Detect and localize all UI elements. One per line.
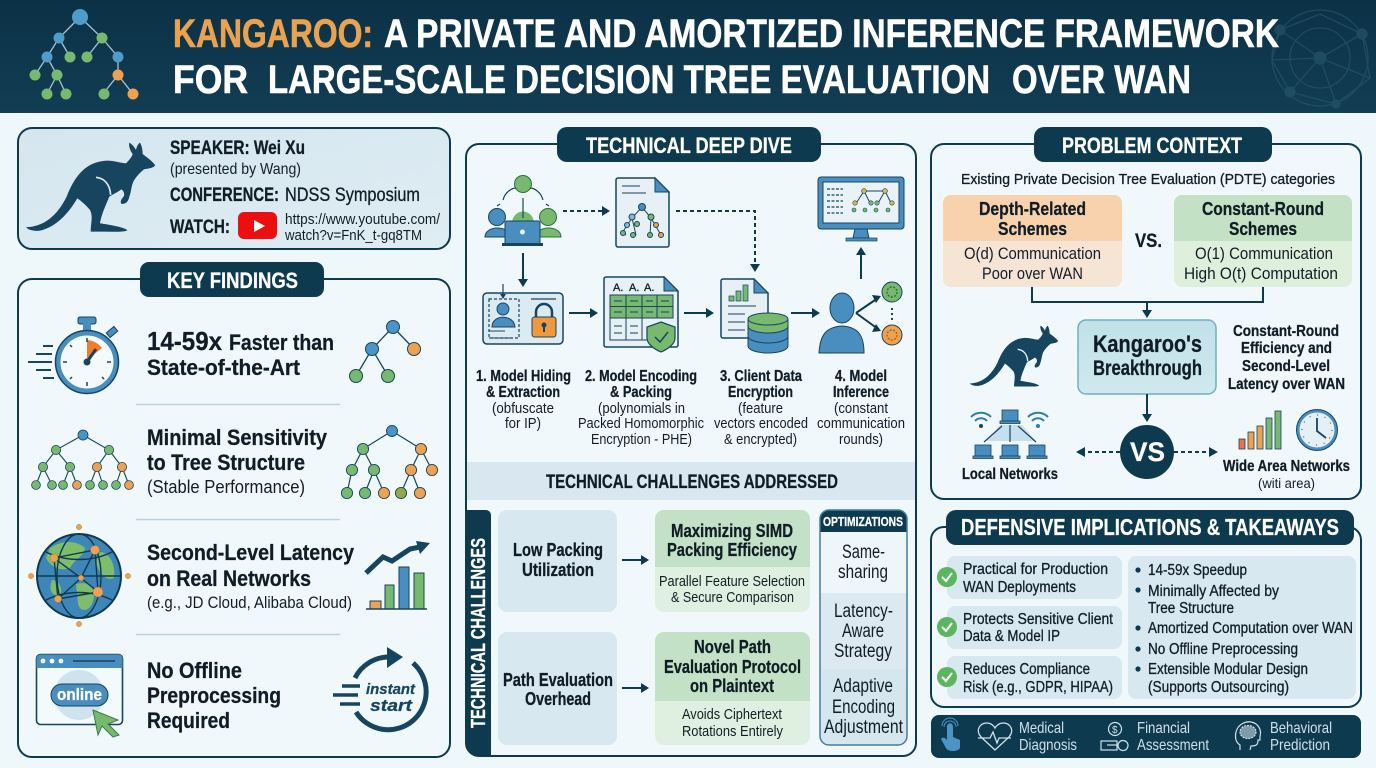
icon: youtube play button: [238, 212, 277, 239]
icon: kangaroo small: [970, 326, 1058, 387]
heading: technical deep dive: [557, 127, 821, 162]
arrow: vs to wan: [1174, 447, 1218, 457]
speaker text: [170, 138, 420, 238]
label: financial assessment: Assessment: [1137, 737, 1209, 754]
panel: key findings: [18, 262, 450, 757]
breakthrough description: Latency over WAN: [1228, 376, 1345, 393]
heading: problem context: [1034, 127, 1272, 162]
icon: team with laptop: [485, 176, 561, 246]
label: behavioral prediction: [1270, 720, 1332, 754]
label: wide area networks: [1223, 458, 1350, 491]
icon: browser online: online: [57, 685, 102, 704]
finding 4 text: [147, 658, 281, 733]
takeaway: practical for production: WAN Deployments: [963, 579, 1076, 596]
optimizations column: Same-: [842, 542, 885, 563]
solution: novel path evaluation protocol: Rotations Entirely: [682, 723, 783, 740]
box: constant-round schemes: Schemes: [1229, 219, 1297, 239]
box: constant-round schemes: High O(t) Computation: [1184, 264, 1338, 283]
icon: data document and database: [721, 279, 788, 353]
label: behavioral prediction: Prediction: [1270, 737, 1330, 754]
title: OVER WAN: [1012, 58, 1191, 102]
challenge: path evaluation overhead: Path Evaluation: [503, 670, 613, 690]
finding 3 text: on Real Networks: [147, 566, 311, 591]
panel: speaker info: [18, 128, 450, 249]
solution: maximizing simd packing: [655, 510, 810, 612]
sidebar: technical challenges: TECHNICAL CHALLENGES: [468, 538, 490, 728]
heading: technical deep dive: TECHNICAL DEEP DIVE: [586, 133, 792, 158]
vs circle: VS: [1130, 437, 1165, 467]
step 3 label: 3. Client Data: [720, 368, 802, 385]
vs label: VS.: [1135, 231, 1162, 252]
step 4 label: (constant: [834, 400, 889, 417]
step 4 label: [817, 368, 905, 448]
icon: decision tree logo: [30, 9, 138, 100]
arrow: step 2 to step 3: [684, 308, 714, 318]
step 1 label: & Extraction: [486, 384, 560, 401]
icon: unbalanced tree right: [341, 426, 438, 499]
finding 2 text: Minimal Sensitivity: [147, 425, 328, 450]
finding 2 text: to Tree Structure: [147, 450, 305, 475]
takeaway bullet list: Tree Structure: [1148, 600, 1234, 617]
speaker text: (presented by Wang): [170, 161, 301, 178]
optimizations column: Adaptive: [833, 676, 893, 697]
arrow: step 3 to step 4: [791, 308, 820, 318]
title: [173, 12, 1279, 102]
label: wide area networks: (witi area): [1258, 475, 1315, 491]
takeaway: reduces compliance risk: Reduces Compliance: [963, 661, 1090, 678]
solution: novel path evaluation protocol: Evaluation Protocol: [664, 657, 801, 677]
challenge: low packing utilization: [498, 510, 617, 612]
connector: schemes to breakthrough: [1032, 287, 1263, 318]
band: technical challenges addressed: TECHNICAL CHALLENGES ADDRESSED: [546, 472, 838, 493]
breakthrough description: Efficiency and: [1241, 340, 1332, 357]
breakthrough description: [1228, 323, 1345, 393]
title: LARGE-SCALE DECISION TREE EVALUATION: [268, 58, 990, 102]
arrow: team to model hiding: [518, 253, 528, 287]
icon: latency chart with arrow: [366, 541, 430, 609]
heading: problem context: PROBLEM CONTEXT: [1062, 133, 1242, 158]
step 1 label: 1. Model Hiding: [476, 368, 571, 385]
optimizations column: Strategy: [834, 641, 892, 662]
label: financial assessment: [1137, 720, 1209, 754]
step 3 label: vectors encoded: [714, 415, 808, 432]
step 4 label: communication: [817, 415, 905, 432]
heading: key findings: KEY FINDINGS: [167, 268, 298, 293]
step 3 label: [714, 368, 808, 448]
box: constant-round schemes: Constant-Round: [1202, 199, 1324, 219]
video url: watch?v=FnK_t-gq8TM: [284, 227, 422, 244]
box: kangaroo's breakthrough: Kangaroo's: [1093, 331, 1202, 358]
takeaway bullet list: Extensible Modular Design: [1148, 661, 1308, 678]
optimizations column: Encoding: [832, 697, 895, 718]
breakthrough description: Constant-Round: [1233, 323, 1339, 340]
label: medical diagnosis: Medical: [1019, 720, 1064, 737]
label: medical diagnosis: [1019, 720, 1077, 754]
heading: key findings: [140, 262, 324, 297]
label: medical diagnosis: Diagnosis: [1019, 737, 1077, 754]
arrow: path evaluation to novel protocol: [622, 683, 649, 693]
intro sentence: Existing Private Decision Tree Evaluation (PDTE) categories: [961, 171, 1335, 188]
speaker text: WATCH:: [170, 217, 230, 238]
challenge: path evaluation overhead: Overhead: [525, 689, 591, 709]
speaker text: CONFERENCE:: [170, 185, 279, 206]
icon: instant start: start: [370, 696, 414, 715]
box: constant-round schemes: O(1) Communication: [1195, 244, 1333, 263]
finding 1 text: 14-59x: [147, 326, 222, 356]
label: local networks: Local Networks: [962, 466, 1058, 483]
icon: financial coins: $: [1112, 725, 1118, 736]
arrow: step 1 to step 2: [569, 308, 598, 318]
finding 2 text: (Stable Performance): [147, 477, 305, 497]
step 4 label: Inference: [833, 384, 889, 401]
icon: kangaroo silhouette: [26, 143, 155, 232]
step 3 label: (feature: [738, 400, 783, 417]
icon: encoded table with shield: A.: [629, 282, 639, 294]
finding 4 text: Required: [147, 708, 230, 733]
challenge: low packing utilization: Utilization: [522, 560, 594, 580]
takeaway: reduces compliance risk: [937, 656, 1122, 699]
header banner: [0, 0, 1376, 113]
icon: pointing hand: [941, 718, 960, 751]
icon: person inference: [819, 282, 902, 353]
step 4 label: 4. Model: [835, 368, 887, 385]
icon: heart pulse: [978, 723, 1012, 750]
icon: decorative network right: [1272, 10, 1370, 108]
icon: encoded table with shield: [604, 277, 678, 352]
box: depth-related schemes: [943, 195, 1122, 287]
breakthrough description: Second-Level: [1242, 358, 1330, 375]
finding 3 text: Second-Level Latency: [147, 540, 355, 565]
video url: [284, 211, 441, 244]
arrow: team to tree document: [563, 206, 610, 216]
panel: problem context: [931, 127, 1361, 499]
takeaway bullet list: No Offline Preprocessing: [1148, 641, 1298, 658]
finding 1 text: [147, 326, 334, 380]
step 2 label: (polynomials in: [598, 400, 685, 417]
finding 3 text: [147, 540, 355, 612]
box: constant-round schemes: [1174, 195, 1352, 287]
box: kangaroo's breakthrough: Breakthrough: [1093, 357, 1202, 380]
finding 4 text: Preprocessing: [147, 683, 281, 708]
solution: novel path evaluation protocol: Avoids Ciphertext: [682, 706, 783, 723]
panel: defensive implications: [931, 510, 1361, 707]
takeaway: protects sensitive data: Protects Sensitive Client: [963, 611, 1114, 628]
optimizations column: Aware: [842, 621, 884, 642]
optimizations column: Latency-: [834, 601, 893, 622]
takeaway bullet list: [1128, 556, 1356, 699]
icon: encoded table with shield: A.: [644, 282, 654, 294]
box: depth-related schemes: Depth-Related: [979, 199, 1086, 219]
takeaway: practical for production: Practical for Production: [963, 561, 1108, 578]
challenge: low packing utilization: Low Packing: [513, 540, 603, 560]
icon: stopwatch: [28, 317, 118, 394]
step 3 label: Encryption: [728, 384, 793, 401]
takeaway: reduces compliance risk: Risk (e.g., GDPR, HIPAA): [963, 679, 1113, 696]
box: depth-related schemes: O(d) Communication: [964, 244, 1101, 263]
takeaway: protects sensitive data: Data & Model IP: [963, 628, 1060, 645]
takeaway bullet list: 14-59x Speedup: [1148, 562, 1247, 579]
optimizations column: sharing: [838, 562, 888, 583]
icon: brain head: [1235, 722, 1261, 750]
finding 1 text: Faster than: [229, 330, 334, 355]
arrow: low packing to simd: [622, 555, 649, 565]
finding 1 text: State-of-the-Art: [147, 355, 301, 380]
heading: defensive implications & takeaways: [946, 510, 1354, 545]
optimizations column: [820, 510, 907, 745]
box: depth-related schemes: Poor over WAN: [982, 264, 1083, 283]
step 1 label: for IP): [505, 415, 541, 432]
solution: maximizing simd packing: & Secure Comparison: [671, 589, 794, 606]
takeaway: practical for production: [937, 556, 1122, 599]
optimizations column: OPTIMIZATIONS: [823, 514, 903, 529]
solution: novel path evaluation protocol: Novel Path: [694, 637, 771, 657]
solution: novel path evaluation protocol: on Plaintext: [690, 676, 774, 696]
solution: maximizing simd packing: Maximizing SIMD: [671, 521, 793, 541]
video url: https://www.youtube.com/: [285, 211, 441, 228]
icon: financial coins: [1101, 722, 1128, 750]
icon: tree document: [616, 178, 669, 247]
icon: instant start: instant: [366, 681, 416, 698]
icon: encoded table with shield: A.: [613, 282, 623, 294]
panel: application domains bar: [931, 715, 1361, 758]
solution: maximizing simd packing: Parallel Feature Selection: [659, 573, 805, 590]
challenge: path evaluation overhead: [498, 632, 617, 745]
finding 4 text: No Offline: [147, 658, 242, 683]
title: FOR: [173, 58, 248, 102]
icon: instant start: [333, 647, 426, 730]
icon: wan signal bars and clock: [1239, 410, 1338, 450]
label: wide area networks: Wide Area Networks: [1223, 458, 1350, 475]
vs circle: [1120, 425, 1174, 479]
step 4 label: rounds): [839, 431, 883, 448]
solution: novel path evaluation protocol: [655, 632, 810, 745]
arrow: inference to monitor: [856, 247, 866, 279]
icon: monitor with tree: [818, 177, 904, 241]
step 3 label: & encrypted): [724, 431, 797, 448]
panel: technical deep dive: [466, 127, 916, 756]
arrow: vs to local: [1076, 447, 1120, 457]
finding 3 text: (e.g., JD Cloud, Alibaba Cloud): [147, 593, 352, 612]
speaker text: NDSS Symposium: [285, 185, 420, 206]
step 2 label: & Packing: [610, 384, 672, 401]
takeaway: protects sensitive data: [937, 606, 1122, 649]
band: technical challenges addressed: [467, 462, 915, 500]
icon: globe network: [28, 524, 131, 627]
arrow: tree document to client encryption: [676, 211, 760, 272]
arrow: breakthrough to vs: [1142, 394, 1152, 422]
box: depth-related schemes: Schemes: [998, 219, 1067, 239]
step 2 label: Encryption - PHE): [591, 431, 692, 448]
step 1 label: [476, 368, 571, 432]
icon: id card with lock: [483, 284, 563, 344]
title: KANGAROO:: [173, 12, 373, 56]
icon: balanced tree left: [32, 430, 133, 489]
box: kangaroo's breakthrough: [1078, 320, 1216, 394]
label: behavioral prediction: Behavioral: [1270, 720, 1332, 737]
label: financial assessment: Financial: [1137, 720, 1190, 737]
step 2 label: 2. Model Encoding: [585, 368, 697, 385]
icon: local network: [971, 410, 1048, 458]
speaker text: SPEAKER: Wei Xu: [170, 138, 305, 159]
takeaway bullet list: (Supports Outsourcing): [1148, 679, 1289, 696]
finding 2 text: [147, 425, 328, 497]
sidebar: technical challenges: [466, 510, 491, 756]
takeaway bullet list: Minimally Affected by: [1148, 583, 1279, 600]
solution: maximizing simd packing: Packing Efficiency: [667, 540, 797, 560]
optimizations column: Adjustment: [824, 717, 904, 738]
step 1 label: (obfuscate: [492, 400, 554, 417]
step 2 label: Packed Homomorphic: [578, 415, 704, 432]
icon: browser online: [36, 654, 122, 737]
step 2 label: [578, 368, 704, 448]
icon: small decision tree: [350, 320, 420, 382]
